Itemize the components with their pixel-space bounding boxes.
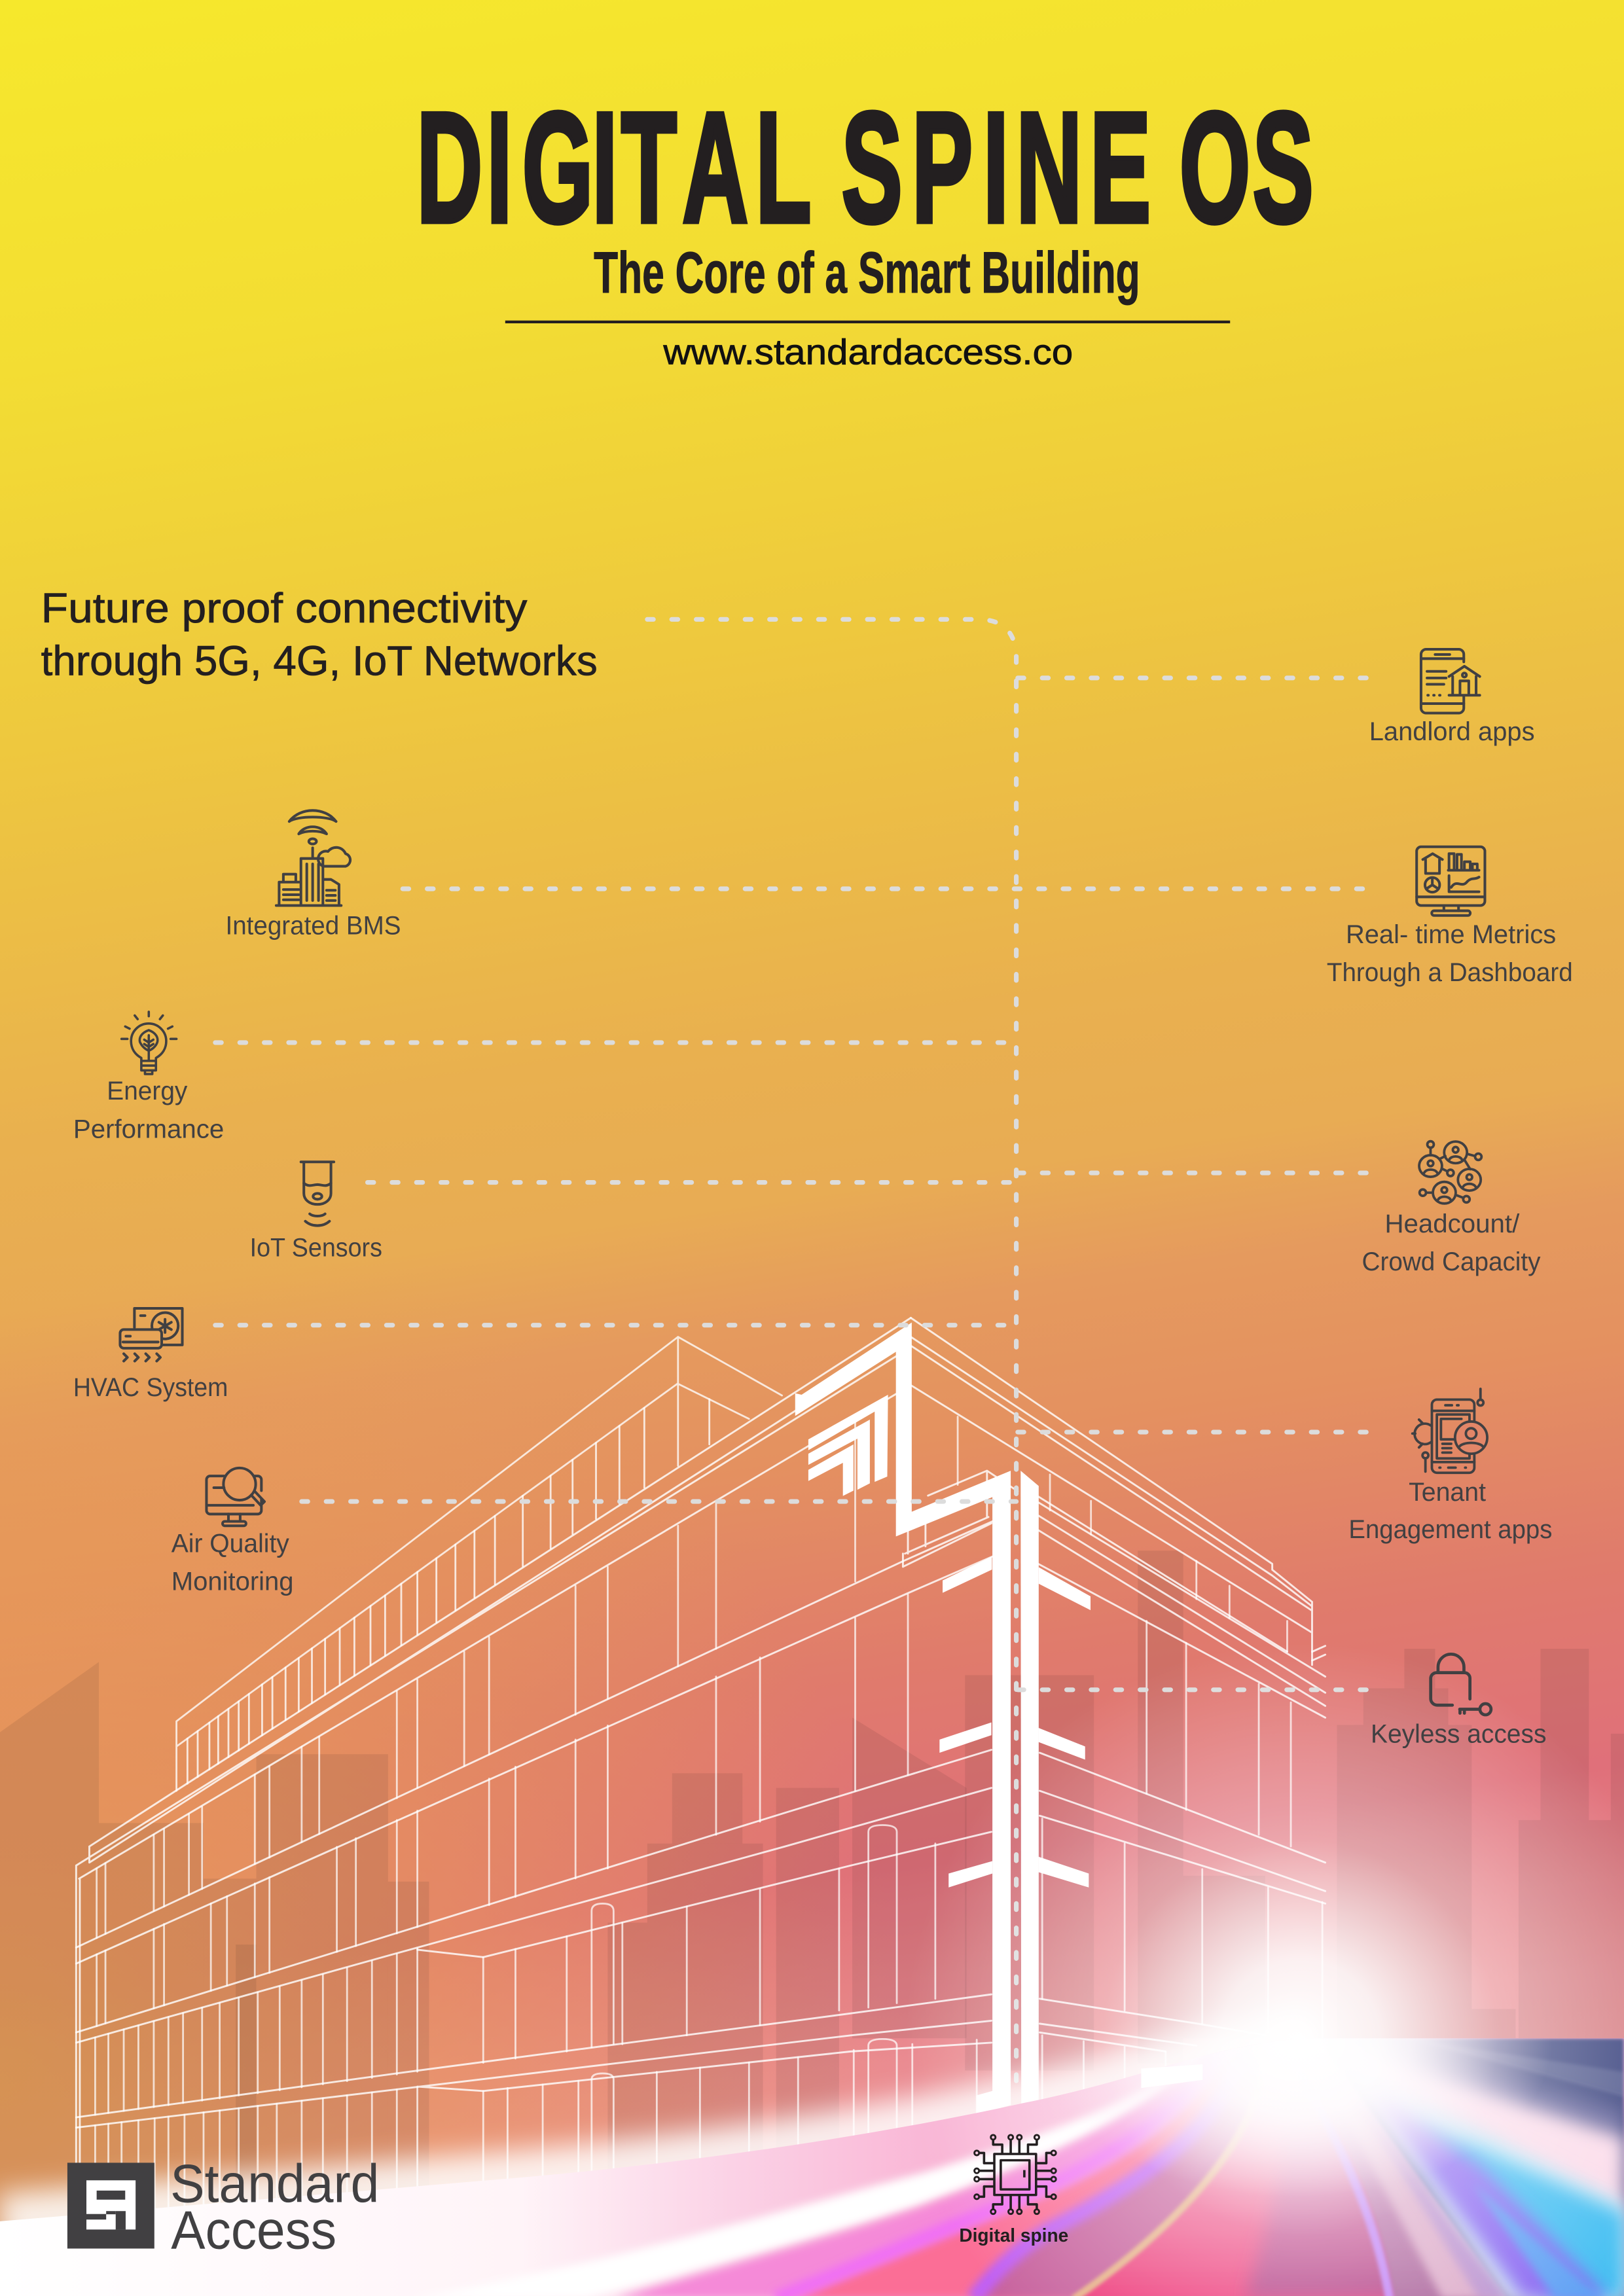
right facade mullions — [1042, 1475, 1322, 2130]
item: Keyless access — [1371, 1654, 1546, 1748]
label: Energy — [107, 1076, 188, 1105]
title divider — [505, 321, 1230, 323]
icon: tenant phone — [1413, 1389, 1487, 1473]
label — [171, 1528, 294, 1596]
grey wedge — [1362, 2041, 1624, 2296]
item: Real-time Metrics — [1327, 847, 1573, 987]
magenta region — [618, 2090, 1170, 2296]
label: Landlord apps — [1369, 717, 1535, 746]
spine zig-zag and left column — [795, 1323, 1011, 2115]
item: Energy Performance — [73, 1012, 224, 1143]
item: Landlord apps — [1369, 649, 1535, 746]
rose region — [800, 2108, 1195, 2296]
icon: people network — [1419, 1141, 1481, 1204]
connectivity heading: through 5G, 4G, IoT Networks — [41, 637, 598, 684]
rooftop pavilion — [177, 1337, 782, 1791]
purple stripe — [964, 2110, 1213, 2296]
icon: smart city with wifi — [276, 810, 350, 906]
glow along road edge — [0, 2038, 1310, 2221]
item: Headcount — [1362, 1141, 1541, 1276]
subtitle: The Core of a Smart Building — [594, 240, 1140, 305]
label — [73, 1076, 224, 1143]
label: IoT Sensors — [250, 1233, 382, 1263]
mauve region — [983, 2131, 1229, 2296]
mauve right region — [1301, 2038, 1624, 2296]
item: Tenant Engagement apps — [1348, 1389, 1552, 1544]
pale pink wedge — [1318, 2065, 1523, 2296]
label — [1327, 920, 1573, 987]
label: Digital spine — [959, 2225, 1068, 2246]
right facade lines — [911, 1318, 1326, 2051]
magenta stripe — [772, 2117, 1166, 2296]
pink white band — [1347, 2047, 1624, 2296]
logo chevrons on building — [808, 1395, 888, 1496]
road flare — [1039, 1889, 1552, 2197]
item: Digital spine — [959, 2135, 1068, 2246]
hot pink region — [1074, 2038, 1624, 2296]
item: Air Quality Monitoring — [171, 1468, 294, 1596]
title: DIGITAL SPINE OS — [417, 81, 1313, 255]
label — [1362, 1209, 1541, 1276]
label — [1348, 1477, 1552, 1544]
icon: monitor with magnifier — [206, 1468, 264, 1526]
Standard Access logo — [67, 2153, 379, 2260]
cyan corner — [1406, 2116, 1624, 2296]
item: HVAC System — [73, 1308, 228, 1402]
label: Integrated BMS — [226, 910, 401, 940]
logo wordmark: Standard — [170, 2153, 379, 2214]
label: Engagement apps — [1348, 1515, 1552, 1544]
vanishing point light flare — [878, 1640, 1624, 2296]
label: Performance — [73, 1114, 224, 1143]
lilac stripe — [1295, 2065, 1390, 2296]
lighter navy streaks — [1406, 2038, 1624, 2097]
blue purple band — [1354, 2076, 1608, 2296]
label: Through a Dashboard — [1327, 958, 1573, 987]
lilac grey band — [1362, 2109, 1508, 2296]
white ribbon — [473, 2086, 1160, 2296]
pale cyan band — [1340, 2057, 1624, 2296]
logo mark — [67, 2162, 154, 2249]
peach stripe — [1074, 2050, 1263, 2296]
label: Tenant — [1409, 1477, 1486, 1507]
label: Air Quality — [171, 1528, 290, 1558]
label: Keyless access — [1371, 1719, 1546, 1748]
spine right column — [1020, 1471, 1039, 2107]
left facade mullions — [95, 1417, 977, 2226]
road tooth of the spine — [1141, 2064, 1202, 2088]
label: Headcount/ — [1384, 1209, 1520, 1238]
blue band — [1471, 2181, 1604, 2296]
icon: padlock and key — [1431, 1654, 1491, 1715]
left facade floor lines — [76, 1318, 1018, 2226]
building wireframe — [76, 1318, 1326, 2226]
icon: air conditioner — [120, 1308, 183, 1361]
icon: ceiling sensor — [301, 1162, 334, 1226]
connectivity heading — [41, 584, 598, 684]
icon: phone with house — [1421, 649, 1480, 713]
label: Crowd Capacity — [1362, 1247, 1541, 1276]
label: Monitoring — [171, 1567, 294, 1596]
label: HVAC System — [73, 1372, 228, 1402]
connectivity heading: Future proof connectivity — [41, 584, 528, 632]
spine teeth — [939, 1556, 1091, 1888]
item: IoT Sensors — [250, 1162, 382, 1263]
dotted connector lines — [215, 619, 1367, 2097]
icon: microchip — [975, 2135, 1056, 2214]
light-streak road — [0, 2038, 1624, 2296]
website url: www.standardaccess.co — [662, 332, 1073, 372]
logo wordmark: Access — [171, 2200, 336, 2260]
label: Real- time Metrics — [1346, 920, 1556, 949]
city skyline silhouette — [0, 1551, 1624, 2296]
navy sky wedge — [1318, 2038, 1624, 2296]
dark magenta region — [1245, 2038, 1624, 2296]
item: Integrated BMS — [226, 810, 401, 940]
icon: dashboard monitor — [1416, 847, 1485, 916]
digital spine white structure — [795, 1323, 1091, 2115]
icon: eco light bulb — [122, 1012, 177, 1074]
logo wordmark — [170, 2153, 379, 2260]
